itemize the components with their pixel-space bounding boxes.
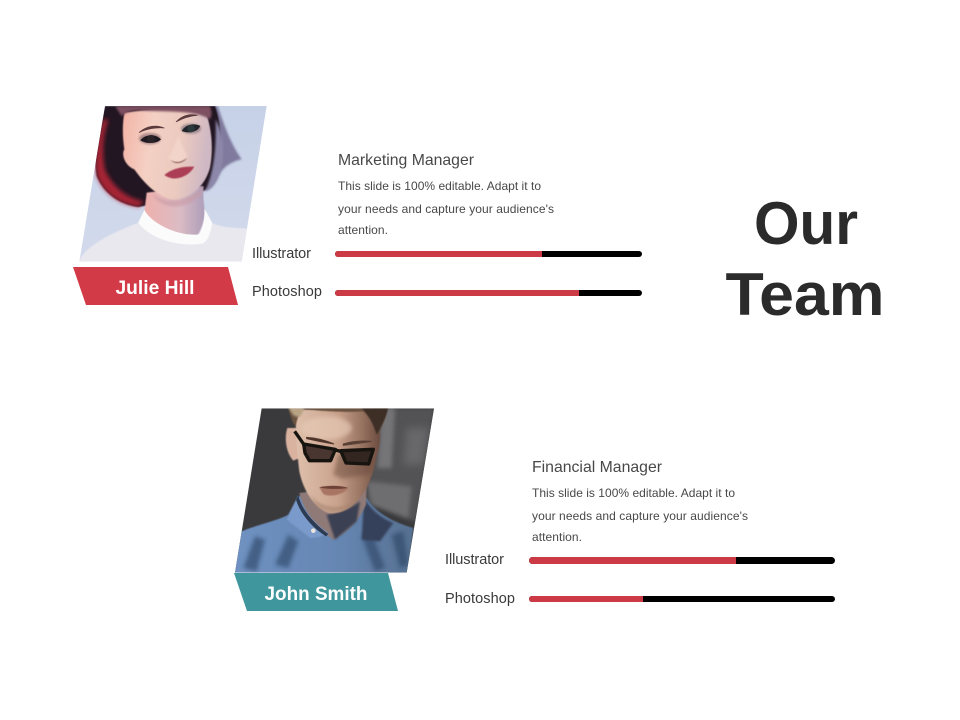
name banner: Julie Hill <box>73 267 238 305</box>
title <box>726 190 884 328</box>
skill bar: Illustrator <box>445 552 835 568</box>
text: description <box>532 486 748 544</box>
title: Team <box>726 261 884 328</box>
title: Our <box>754 190 858 257</box>
skill bar: Illustrator <box>252 246 642 262</box>
skill bar: Illustrator: Illustrator <box>445 552 504 568</box>
panel: Julie Hill <box>73 104 642 305</box>
skill bar: Photoshop <box>252 284 642 300</box>
text: description <box>338 179 554 237</box>
text: description: your needs and capture your audience's <box>532 509 748 523</box>
infographic canvas <box>73 106 881 611</box>
portrait: Julie Hill <box>75 104 275 264</box>
glasses <box>304 444 373 464</box>
text: description: This slide is 100% editable. Adapt it to <box>532 486 735 500</box>
skill bar: Photoshop <box>445 591 835 607</box>
name banner: John Smith: John Smith <box>264 584 368 605</box>
text: description: attention. <box>338 223 388 237</box>
text: description: attention. <box>532 530 582 544</box>
skill bar: Photoshop: Photoshop <box>445 591 515 607</box>
text: job title: Financial Manager <box>532 459 663 476</box>
text: job title: Marketing Manager <box>338 152 475 169</box>
text: description: This slide is 100% editable. Adapt it to <box>338 179 541 193</box>
name banner: John Smith <box>234 573 398 611</box>
skill bar: Photoshop: Photoshop <box>252 284 322 300</box>
name banner: Julie Hill: Julie Hill <box>116 278 194 299</box>
panel: John Smith <box>232 406 835 611</box>
text: description: your needs and capture your audience's <box>338 202 554 216</box>
portrait: John Smith <box>232 406 438 576</box>
skill bar: Illustrator: Illustrator <box>252 246 311 262</box>
